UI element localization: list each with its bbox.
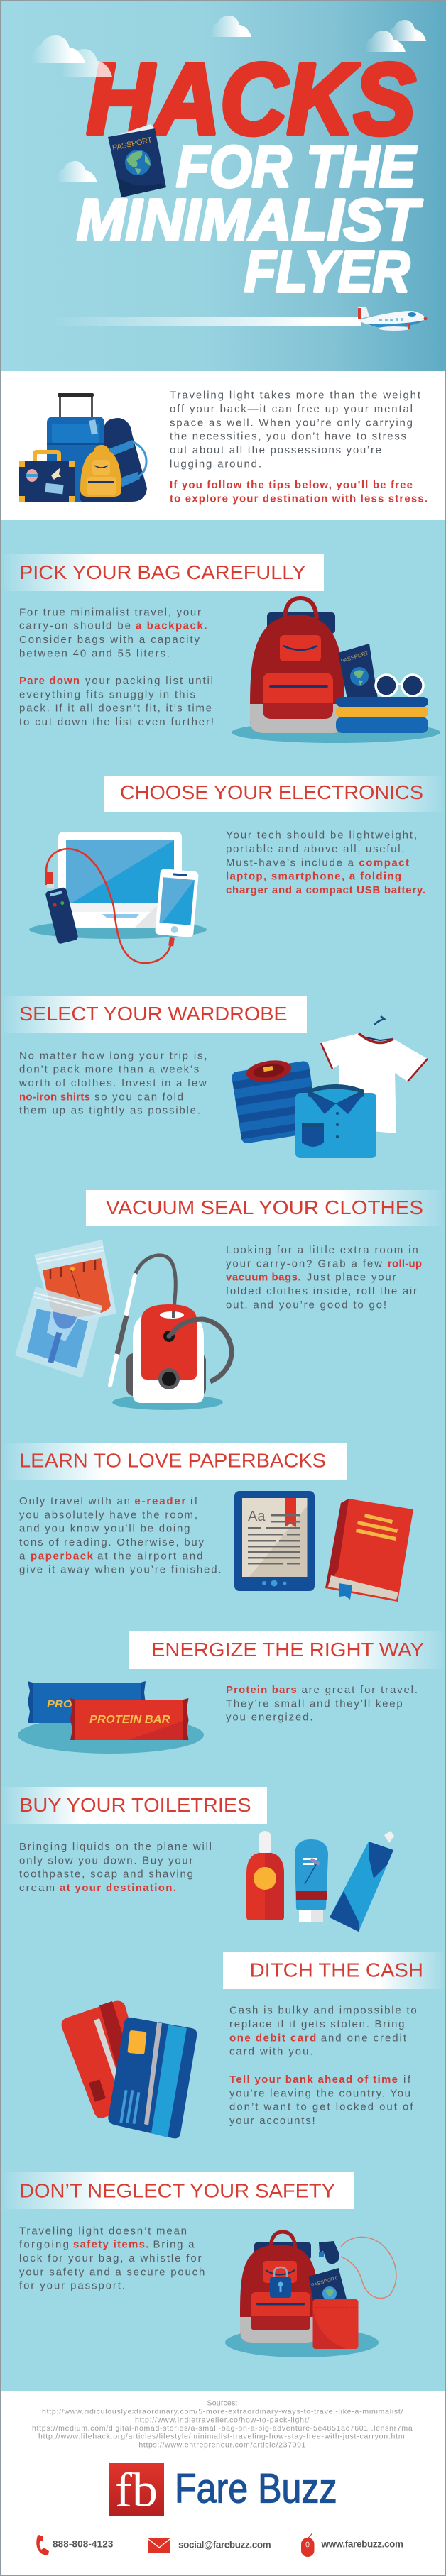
text block: your safety and a secure pouch bbox=[19, 2266, 205, 2278]
icon: vacuum bags with clothes bbox=[15, 1240, 116, 1378]
heading: VACUUM SEAL YOUR CLOTHES bbox=[106, 1196, 423, 1218]
text block: between 40 and 55 liters. bbox=[19, 647, 170, 659]
icon: protein bars: PROTEIN BAR bbox=[89, 1714, 170, 1726]
text block: Protein bars bbox=[226, 1684, 297, 1696]
text block: toothpaste, soap and shaving bbox=[19, 1868, 193, 1881]
text block: intro: Traveling light takes more than the weight bbox=[170, 390, 421, 402]
text block: sources: Sources: bbox=[207, 2399, 237, 2407]
text block: Traveling light doesn’t mean bbox=[19, 2225, 187, 2237]
text block: carry-on should be bbox=[19, 620, 131, 632]
icon: luggage bbox=[19, 393, 147, 502]
text block: intro: the necessities, you don’t have to stress bbox=[170, 431, 406, 443]
panel: select your wardrobe bbox=[0, 996, 428, 1158]
text block: you’re leaving the country. You bbox=[229, 2087, 410, 2099]
text block: intro bbox=[170, 390, 428, 505]
text block: your accounts! bbox=[229, 2115, 315, 2127]
heading bbox=[0, 996, 307, 1033]
panel: safety bbox=[0, 2172, 396, 2357]
icon: toiletry bottles bbox=[246, 1831, 394, 1932]
text block: Consider bags with a capacity bbox=[19, 634, 200, 646]
text block: intro: If you follow the tips below, you’ll be free bbox=[170, 479, 413, 491]
text block: Only travel with an bbox=[19, 1495, 130, 1507]
text block bbox=[19, 2225, 205, 2292]
text block: Cash is bulky and impossible to bbox=[229, 2005, 417, 2017]
text block: sources: http://www.lifehack.org/articles/lifestyle/minimalist-traveling-how-stay-free-with-just-carryon.html bbox=[38, 2433, 407, 2441]
heading: BUY YOUR TOILETRIES bbox=[19, 1794, 251, 1816]
text block: forgoing bbox=[19, 2239, 69, 2251]
text block: everything fits snuggly in this bbox=[19, 688, 195, 700]
panel: choose your electronics bbox=[29, 776, 446, 963]
text block: for your passport. bbox=[19, 2280, 125, 2292]
text block: compact bbox=[359, 857, 409, 869]
text block: to cut down the list even further! bbox=[19, 716, 214, 728]
text block: sources bbox=[32, 2399, 413, 2449]
panel: hero header bbox=[0, 0, 446, 371]
text block: intro: to explore your destination with less stress. bbox=[170, 492, 428, 505]
heading: DITCH THE CASH bbox=[250, 1959, 423, 1981]
text block: Your tech should be lightweight, bbox=[226, 830, 417, 842]
text block: cream bbox=[19, 1882, 55, 1894]
contact: website bbox=[301, 2533, 403, 2557]
text block: Tell your bank ahead of time bbox=[229, 2074, 398, 2086]
title bbox=[77, 43, 423, 304]
text block: charger and a compact USB battery. bbox=[226, 884, 425, 896]
icon: folded clothes bbox=[230, 1016, 428, 1158]
title: HACKS bbox=[87, 43, 415, 156]
text block bbox=[226, 1684, 418, 1724]
text block bbox=[226, 830, 425, 896]
text block: vacuum bags. bbox=[226, 1272, 301, 1284]
text block: at your destination. bbox=[60, 1882, 176, 1894]
contact: phone: 888-808-4123 bbox=[53, 2538, 114, 2549]
text block: don’t want to get locked out of bbox=[229, 2101, 413, 2113]
heading: ENERGIZE THE RIGHT WAY bbox=[151, 1639, 424, 1661]
text block: worth of clothes. Invest in a few bbox=[18, 1077, 207, 1089]
text block: are great for travel. bbox=[301, 1684, 418, 1696]
text block: one debit card bbox=[229, 2032, 316, 2044]
heading bbox=[0, 1443, 347, 1480]
text block: tons of reading. Otherwise, buy bbox=[19, 1536, 205, 1548]
text block: you energized. bbox=[226, 1712, 312, 1724]
icon: airplane with trail bbox=[48, 307, 428, 331]
panel: introduction bbox=[0, 371, 446, 520]
text block: pack. If it all doesn’t fit, it’s time bbox=[19, 703, 212, 715]
contact: website: www.farebuzz.com bbox=[321, 2538, 403, 2549]
icon: passport: PASSPORT bbox=[111, 136, 153, 153]
heading bbox=[86, 1190, 446, 1226]
contact: email: social@farebuzz.com bbox=[178, 2540, 271, 2550]
text block: portable and above all, useful. bbox=[226, 843, 405, 855]
panel: vacuum seal bbox=[15, 1190, 446, 1410]
text block: no-iron shirts bbox=[19, 1091, 90, 1103]
text block: only slow you down. Buy your bbox=[19, 1854, 193, 1866]
text block bbox=[19, 606, 214, 728]
text block: sources: https://medium.com/digital-nomad-stories/a-small-bag-on-a-big-adventure-5e4851ac7601 .lensnr7ma bbox=[32, 2424, 413, 2433]
text block: if bbox=[403, 2074, 411, 2086]
heading bbox=[223, 1952, 446, 1989]
text block: out, and you’re good to go! bbox=[226, 1299, 386, 1311]
heading bbox=[0, 2172, 354, 2209]
panel: ditch the cash bbox=[62, 1952, 446, 2138]
text block: intro: space as well. When you’re only carrying bbox=[170, 417, 413, 429]
text block: Bring a bbox=[153, 2239, 195, 2251]
text block: replace if it gets stolen. Bring bbox=[229, 2018, 405, 2030]
heading bbox=[0, 554, 324, 591]
text block: a backpack. bbox=[136, 620, 207, 632]
panel: paperbacks bbox=[0, 1443, 413, 1602]
text block: your packing list until bbox=[85, 675, 213, 687]
text block: at the airport and bbox=[97, 1550, 203, 1562]
icon: paperback book bbox=[325, 1499, 413, 1602]
text block: e-reader bbox=[134, 1495, 186, 1507]
text block: lock for your bag, a whistle for bbox=[19, 2252, 202, 2264]
text block: folded clothes inside, roll the air bbox=[226, 1285, 417, 1297]
text block: Must-have’s include a bbox=[226, 857, 354, 869]
text block bbox=[18, 1050, 207, 1117]
icon: protein bars bbox=[18, 1681, 204, 1754]
text block bbox=[19, 1841, 212, 1894]
icon: backpack and gear: PASSPORT bbox=[340, 649, 369, 664]
heading: LEARN TO LOVE PAPERBACKS bbox=[19, 1449, 326, 1472]
title: FOR THE bbox=[176, 133, 417, 199]
icon: backpack and gear bbox=[232, 598, 440, 743]
text block bbox=[229, 2005, 417, 2127]
text block: Just place your bbox=[307, 1272, 396, 1284]
text block: sources: http://www.indietraveller.co/how-to-pack-light/ bbox=[135, 2416, 309, 2424]
text block: card with you. bbox=[229, 2046, 312, 2058]
icon: protein bars: PROTEIN BAR bbox=[47, 1698, 128, 1710]
contact: email bbox=[148, 2538, 271, 2553]
logo: Fare Buzz: fb bbox=[115, 2462, 158, 2516]
icon: e-reader: Aa bbox=[248, 1509, 266, 1524]
icon: backpack with lock, whistle, passport and pouch: PASSPORT bbox=[311, 2276, 339, 2289]
panel: energize bbox=[18, 1631, 446, 1754]
icon: e-reader bbox=[234, 1491, 315, 1591]
heading bbox=[0, 1787, 267, 1824]
text block: paperback bbox=[31, 1550, 94, 1562]
icon: laptop, phone, battery and cable bbox=[29, 832, 207, 963]
text block: Pare down bbox=[19, 675, 80, 687]
logo: Fare Buzz bbox=[109, 2462, 337, 2516]
text block: give it away when you’re finished. bbox=[19, 1564, 222, 1576]
heading: PICK YOUR BAG CAREFULLY bbox=[19, 561, 306, 583]
clouds bbox=[31, 16, 426, 182]
panel: footer bbox=[0, 2391, 446, 2576]
text block: so you can fold bbox=[94, 1091, 183, 1103]
text block: Bringing liquids on the plane will bbox=[19, 1841, 212, 1853]
panel: pick your bag bbox=[0, 554, 440, 743]
title: MINIMALIST bbox=[77, 187, 423, 253]
text block: don’t pack more than a week’s bbox=[19, 1064, 199, 1076]
text block: safety items. bbox=[73, 2239, 149, 2251]
text block: and you know you’ll be doing bbox=[19, 1523, 190, 1535]
icon: bank cards bbox=[62, 2001, 197, 2138]
text block: They’re small and they’ll keep bbox=[226, 1697, 403, 1710]
text block: sources: http://www.ridiculouslyextraordinary.com/5-more-extraordinary-ways-to-travel-like-a-minimalist/ bbox=[42, 2408, 403, 2416]
text block: intro: out about all the possessions you’re bbox=[170, 444, 381, 456]
text block: For true minimalist travel, your bbox=[19, 606, 201, 618]
text block: if bbox=[190, 1495, 198, 1507]
panel: toiletries bbox=[0, 1787, 394, 1932]
title: FLYER bbox=[244, 238, 410, 304]
text block: you absolutely have the room, bbox=[19, 1509, 197, 1521]
heading: SELECT YOUR WARDROBE bbox=[19, 1003, 287, 1025]
text block: a bbox=[19, 1550, 26, 1562]
text block: No matter how long your trip is, bbox=[19, 1050, 207, 1062]
heading: CHOOSE YOUR ELECTRONICS bbox=[120, 781, 423, 803]
logo: Fare Buzz: Fare Buzz bbox=[175, 2466, 337, 2512]
text block: roll-up bbox=[388, 1257, 422, 1270]
icon: passport bbox=[108, 124, 166, 197]
contact: phone bbox=[36, 2535, 114, 2555]
icon: backpack with lock, whistle, passport and pouch bbox=[225, 2232, 396, 2357]
text block: and one credit bbox=[321, 2032, 407, 2044]
heading bbox=[104, 776, 446, 812]
text block: laptop, smartphone, a folding bbox=[226, 871, 401, 883]
heading: DON’T NEGLECT YOUR SAFETY bbox=[19, 2180, 335, 2202]
text block: intro: lugging around. bbox=[170, 458, 261, 470]
text block: Looking for a little extra room in bbox=[226, 1244, 418, 1256]
heading bbox=[129, 1631, 446, 1669]
text block bbox=[19, 1495, 222, 1576]
text block: your carry-on? Grab a few bbox=[226, 1257, 382, 1270]
text block bbox=[226, 1244, 422, 1311]
text block: them up as tightly as possible. bbox=[19, 1105, 200, 1117]
text block: intro: off your back—it can free up your mental bbox=[170, 403, 413, 415]
text block: sources: https://www.entrepreneur.com/article/237091 bbox=[138, 2440, 306, 2449]
icon: vacuum cleaner bbox=[110, 1255, 232, 1410]
